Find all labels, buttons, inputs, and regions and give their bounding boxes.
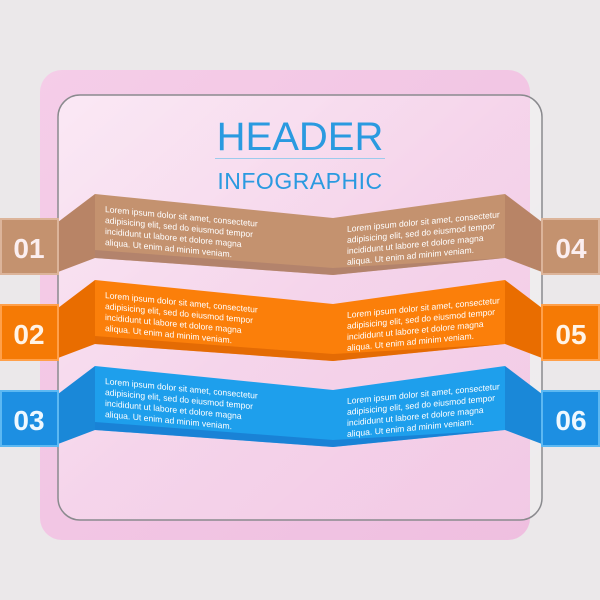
- band 3: blue: [1, 366, 599, 447]
- band 1: brown: incididunt ut labore et dolore magna: [347, 233, 484, 256]
- band 2: orange: incididunt ut labore et dolore magna: [347, 319, 484, 342]
- band 1: brown: incididunt ut labore et dolore magna: [105, 226, 242, 249]
- band 3: blue: incididunt ut labore et dolore magna: [105, 398, 242, 421]
- band 1: brown: 04: [555, 233, 587, 264]
- band 1: brown: aliqua. Ut enim ad minim veniam.: [105, 237, 232, 259]
- band 2: orange: incididunt ut labore et dolore magna: [105, 312, 242, 335]
- band 3: blue: aliqua. Ut enim ad minim veniam.: [347, 417, 474, 439]
- band 3: blue: incididunt ut labore et dolore magna: [347, 405, 484, 428]
- band 3: blue: Lorem ipsum dolor sit amet, consectetur: [347, 381, 500, 406]
- band 1: brown: Lorem ipsum dolor sit amet, consectetur: [347, 209, 500, 234]
- band 3: blue: adipisicing elit, sed do eiusmod tempor: [347, 393, 495, 417]
- band 3: blue: 03: [13, 405, 45, 436]
- band 3: blue: aliqua. Ut enim ad minim veniam.: [105, 409, 232, 431]
- band 2: orange: 05: [555, 319, 587, 350]
- band 1: brown: aliqua. Ut enim ad minim veniam.: [347, 245, 474, 267]
- band 1: brown: Lorem ipsum dolor sit amet, consectetur: [105, 204, 258, 229]
- band 1: brown: adipisicing elit, sed do eiusmod tempor: [105, 215, 253, 239]
- title: INFOGRAPHIC: [217, 168, 383, 194]
- band 3: blue: Lorem ipsum dolor sit amet, consectetur: [105, 376, 258, 401]
- band 2: orange: aliqua. Ut enim ad minim veniam.: [105, 323, 232, 345]
- band 1: brown: adipisicing elit, sed do eiusmod tempor: [347, 221, 495, 245]
- band 2: orange: Lorem ipsum dolor sit amet, consectetur: [105, 290, 258, 315]
- band 2: orange: 02: [13, 319, 45, 350]
- band 2: orange: aliqua. Ut enim ad minim veniam.: [347, 331, 474, 353]
- band 2: orange: adipisicing elit, sed do eiusmod tempor: [105, 301, 253, 325]
- band 2: orange: [1, 280, 599, 361]
- title: HEADER: [217, 115, 383, 159]
- title: [215, 115, 385, 194]
- band 3: blue: 06: [555, 405, 587, 436]
- band 1: brown: 01: [13, 233, 45, 264]
- band 2: orange: Lorem ipsum dolor sit amet, consectetur: [347, 295, 500, 320]
- band 2: orange: adipisicing elit, sed do eiusmod tempor: [347, 307, 495, 331]
- band 1: brown: [1, 194, 599, 275]
- glass frame: [58, 95, 542, 520]
- pink card: [40, 70, 530, 540]
- band 3: blue: adipisicing elit, sed do eiusmod tempor: [105, 387, 253, 411]
